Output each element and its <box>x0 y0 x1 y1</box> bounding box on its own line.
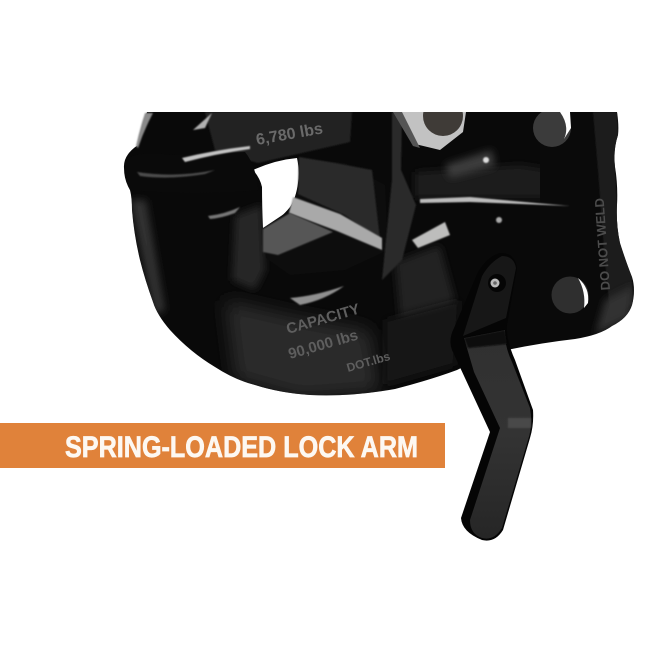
shading inside body <box>130 112 634 398</box>
mounting hole lower <box>552 276 588 314</box>
caption banner <box>0 423 445 468</box>
mounting plate sheen <box>415 166 540 198</box>
capacity text <box>286 303 390 372</box>
throat inner surface <box>262 156 384 256</box>
capacity text: CAPACITY <box>284 301 362 338</box>
embossed warning on plate edge: DO NOT WELD <box>592 198 613 291</box>
capacity text: 90,000 lbs <box>286 327 360 363</box>
lock arm <box>450 253 533 541</box>
embossed rating text: 6,780 lbs <box>255 120 324 149</box>
infographic canvas <box>0 112 634 541</box>
hook body <box>124 112 634 395</box>
nut and bolt <box>393 112 466 150</box>
throat opening <box>253 158 299 228</box>
mounting plate highlights <box>382 112 570 280</box>
capacity text: DOT.lbs <box>345 349 392 375</box>
latch plate <box>205 112 352 163</box>
lower hook sheen <box>225 300 380 398</box>
highlight above capacity text <box>290 286 344 305</box>
arm pivot screw <box>488 274 506 292</box>
latch top <box>125 113 324 219</box>
mounting hole upper <box>533 109 571 147</box>
photo: pintle hook <box>124 96 634 541</box>
caption text: SPRING-LOADED LOCK ARM <box>65 431 418 464</box>
